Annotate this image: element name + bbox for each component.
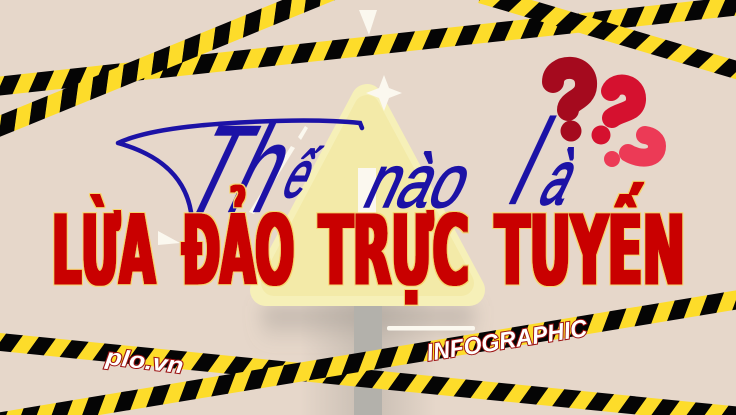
- question mark medium: [592, 85, 636, 144]
- title: LỪA ĐẢO TRỰC TUYẾN: TRỰC: [319, 195, 469, 307]
- icon: question marks: [553, 68, 657, 167]
- title: LỪA ĐẢO TRỰC TUYẾN: LỪA: [52, 195, 155, 307]
- word: nào: nào: [353, 139, 486, 223]
- caution tape: upper long: [0, 0, 736, 98]
- caution tape: lower rising: [0, 287, 736, 415]
- title: LỪA ĐẢO TRỰC TUYẾN: ĐẢO: [182, 185, 294, 307]
- word: Thế: ế: [272, 138, 328, 212]
- title: LỪA ĐẢO TRỰC TUYẾN: [52, 182, 685, 307]
- caution tape: lower descending: [0, 331, 736, 415]
- label: INFOGRAPHIC: INFOGRAPHIC: [425, 315, 590, 367]
- watermark: plo.vn: plo.vn: [103, 343, 185, 378]
- script heading: Thế nào là: [118, 94, 613, 239]
- warning sign triangle: [266, 100, 469, 290]
- sign pole: [354, 304, 382, 415]
- caution tape: upper steep: [0, 0, 356, 143]
- white sign details: [158, 10, 475, 330]
- question mark dark: [553, 68, 586, 142]
- caution tape: top right: [478, 0, 736, 85]
- T flourish: [118, 121, 362, 212]
- question mark light: [604, 135, 657, 167]
- sign pole shadow: [262, 306, 474, 415]
- word: Thế: Th: [164, 99, 317, 239]
- word: là: là: [492, 94, 613, 230]
